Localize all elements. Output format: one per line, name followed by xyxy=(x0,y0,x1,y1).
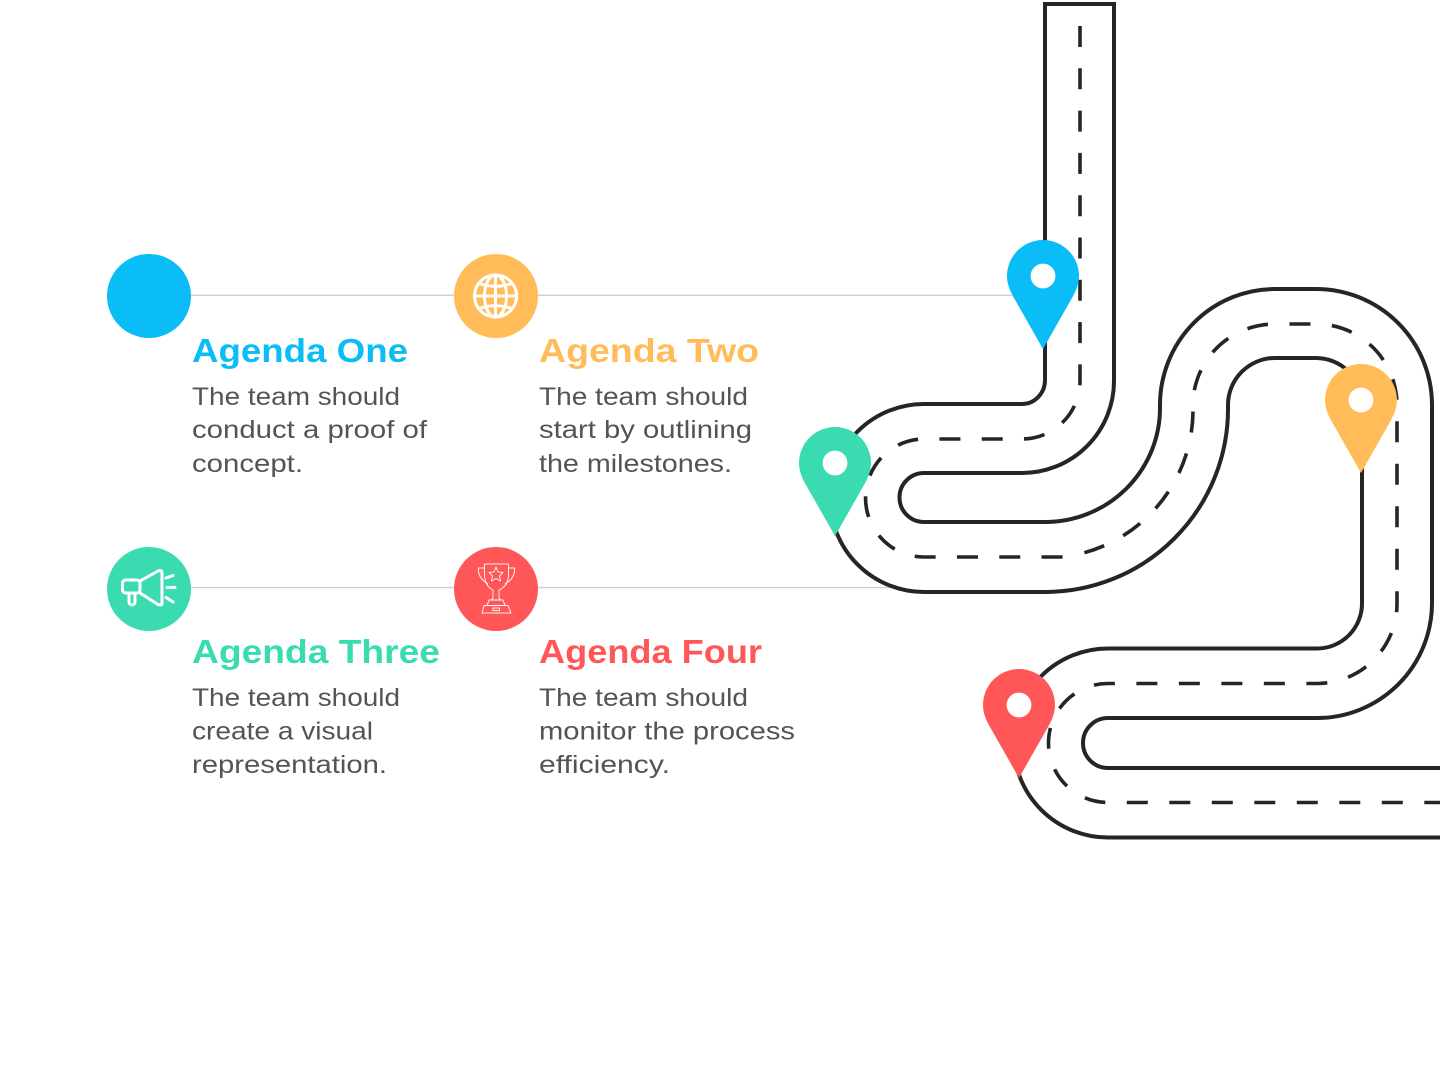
heading: agenda one: Agenda One xyxy=(192,332,408,369)
text: agenda two description: start by outlining xyxy=(539,416,752,444)
icon: blue circle xyxy=(107,254,191,338)
heading: agenda two: Agenda Two xyxy=(539,332,759,369)
text: agenda four description: monitor the process xyxy=(539,718,795,746)
text: agenda three description xyxy=(192,684,400,779)
agenda two block xyxy=(454,254,759,478)
road centre dashes: lower section xyxy=(1048,324,1440,802)
road illustration xyxy=(830,4,1440,838)
road edge: outer left line xyxy=(830,358,1440,838)
icon: megaphone in green circle xyxy=(107,547,191,631)
text: agenda one description: conduct a proof of xyxy=(192,416,427,444)
text: agenda two description: The team should xyxy=(539,383,748,411)
agenda four block xyxy=(454,547,795,779)
map pin: blue xyxy=(1007,240,1079,349)
road edge: inner right line xyxy=(900,4,1440,768)
agenda one block xyxy=(107,254,427,478)
text: agenda two description: the milestones. xyxy=(539,450,732,478)
road centre dashes: upper section xyxy=(866,26,1080,557)
heading: agenda three: Agenda Three xyxy=(192,633,440,670)
text: agenda four description xyxy=(539,684,795,779)
map pin: red xyxy=(983,669,1055,778)
heading: agenda four: Agenda Four xyxy=(539,633,762,670)
text: agenda one description: concept. xyxy=(192,450,303,478)
text: agenda four description: efficiency. xyxy=(539,751,670,779)
text: agenda four description: The team should xyxy=(539,684,748,712)
map pin: orange xyxy=(1325,364,1397,473)
agenda three block xyxy=(107,547,440,779)
text: agenda one description: The team should xyxy=(192,383,400,411)
icon: globe in orange circle xyxy=(454,254,538,338)
map pin: green xyxy=(799,427,871,536)
text: agenda three description: create a visual xyxy=(192,718,373,746)
text: agenda three description: representation. xyxy=(192,751,387,779)
text: agenda one description xyxy=(192,383,427,478)
icon: trophy in red circle xyxy=(454,547,538,631)
text: agenda three description: The team should xyxy=(192,684,400,712)
text: agenda two description xyxy=(539,383,752,478)
